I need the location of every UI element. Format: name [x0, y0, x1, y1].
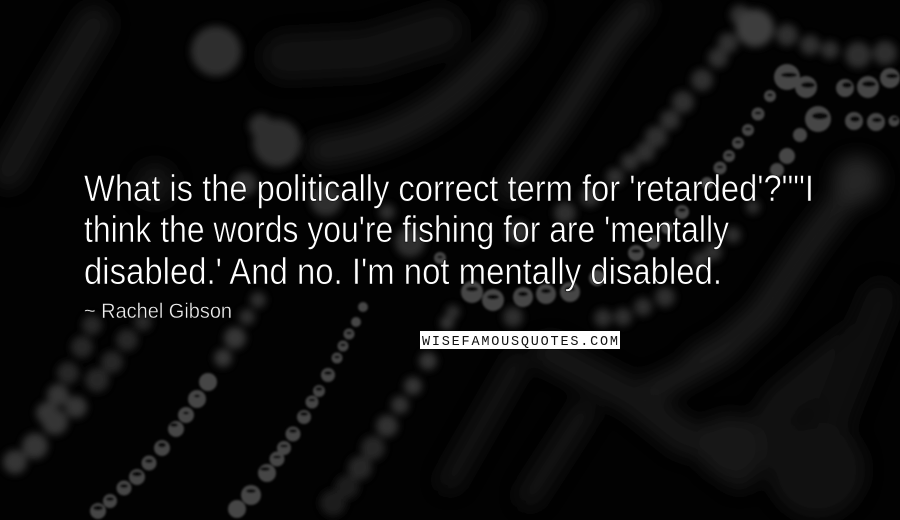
quote text: disabled.' And no. I'm not mentally disabled.	[84, 250, 722, 292]
quote text	[84, 167, 814, 292]
quote text: What is the politically correct term for 'retarded'?""I	[84, 167, 814, 209]
background: sharp water-drop beads	[90, 64, 900, 519]
author attribution: ~ Rachel Gibson	[84, 300, 232, 323]
watermark badge: WISEFAMOUSQUOTES.COM	[422, 335, 618, 350]
quote text: think the words you're fishing for are 'mentally	[84, 208, 729, 250]
